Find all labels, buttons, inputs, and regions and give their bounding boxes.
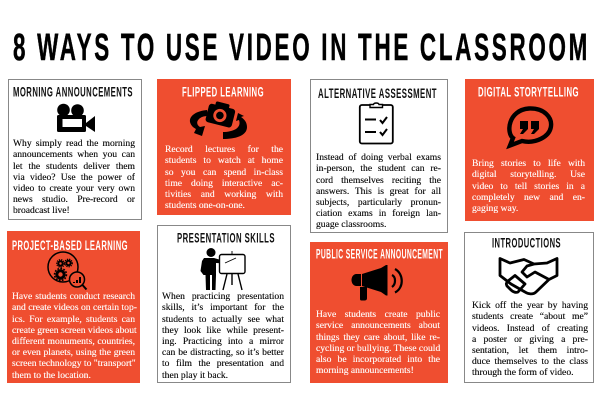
icon: handshake xyxy=(498,257,558,296)
text block xyxy=(12,291,137,380)
text block: When practicing presentation xyxy=(162,291,284,302)
text block: gaging way. xyxy=(472,203,518,214)
panel: presentation skills xyxy=(157,225,291,383)
text block: video to tell stories in a xyxy=(472,181,585,192)
text block: Have students create public xyxy=(316,309,440,320)
text block: via video? Use the power of xyxy=(13,172,135,183)
text block: news studio. Pre-record or xyxy=(13,194,135,205)
text block: skills, it’s important for the xyxy=(162,302,284,313)
text block: tivities and working with xyxy=(165,189,283,200)
text block: let the students deliver them xyxy=(13,161,135,172)
text block: students to watch at home xyxy=(165,155,283,166)
icon: speech bubble xyxy=(506,106,554,150)
text block xyxy=(162,291,284,380)
text block: announcements when you can xyxy=(13,149,135,160)
text block: videos. Instead of creating xyxy=(472,323,588,334)
text block: video to create your very own xyxy=(13,183,135,194)
heading: alternative assessment: ALTERNATIVE ASSESSMENT xyxy=(318,86,437,101)
text block: create green screen videos about xyxy=(12,325,137,336)
text block: screen technology to "transport" xyxy=(12,358,136,369)
text block: digital storytelling. Use xyxy=(472,169,585,180)
text block: ing. Practicing into a mirror xyxy=(162,336,284,347)
text block xyxy=(472,300,588,378)
text block: students to actually see what xyxy=(162,314,284,325)
text block xyxy=(165,144,283,211)
text block: and create videos on certain top- xyxy=(12,302,137,313)
panel: project-based learning xyxy=(7,231,140,383)
text block: things they care about, like re- xyxy=(316,332,440,343)
text block xyxy=(316,309,440,376)
text block: ics. For example, students can xyxy=(12,314,135,325)
panel: digital storytelling xyxy=(465,79,594,221)
panel: public service announcement xyxy=(310,242,448,383)
text block: answers. This is great for all xyxy=(316,186,441,197)
text block: Have students conduct research xyxy=(12,291,135,302)
text block: to film the presentation and xyxy=(162,358,284,369)
text block: so you can spend in-class xyxy=(165,167,283,178)
panel: morning announcements xyxy=(8,79,142,220)
text block: then play it back. xyxy=(162,370,228,380)
text block: cycling or bullying. These could xyxy=(316,343,440,354)
text block: broadcast live! xyxy=(13,205,70,216)
text block: Kick off the year by having xyxy=(472,300,588,311)
text block: through the form of video. xyxy=(472,367,574,378)
text block: duce themselves to the class xyxy=(472,356,588,367)
icon: video camera xyxy=(57,104,95,132)
text block xyxy=(12,138,135,216)
text block: Record lectures for the xyxy=(165,144,283,155)
text block xyxy=(316,152,441,230)
panel: flipped learning xyxy=(157,79,291,215)
text block: sentation, let them intro- xyxy=(472,345,588,356)
heading: morning announcements: MORNING ANNOUNCEMENTS xyxy=(13,84,133,100)
text block: morning announcements! xyxy=(316,365,414,376)
heading: project-based learning: PROJECT-BASED LEARNING xyxy=(12,238,128,253)
text block: students create “about me” xyxy=(472,311,588,322)
panel: alternative assessment xyxy=(310,79,448,233)
text block: students one-on-one. xyxy=(165,200,245,211)
text block xyxy=(472,158,585,214)
text block: in-person, the student can re- xyxy=(316,163,441,174)
text block: ciation exams in foreign lan- xyxy=(316,208,441,219)
text block: also be incorporated into the xyxy=(316,354,440,365)
text block: service announcements about xyxy=(316,320,440,331)
text block: guage classrooms. xyxy=(316,219,386,230)
text block: a poster or giving a pre- xyxy=(472,334,588,345)
text block: can be distracting, so it’s better xyxy=(162,347,284,358)
text block: completely new and en- xyxy=(472,192,585,203)
text block: time doing interactive ac- xyxy=(165,178,283,189)
text block: different monuments, countries, xyxy=(12,336,135,347)
heading: presentation skills: PRESENTATION SKILLS xyxy=(177,231,275,246)
text block: they look like while present- xyxy=(162,325,284,336)
icon: gears and magnifier xyxy=(47,251,88,290)
heading: flipped learning: FLIPPED LEARNING xyxy=(182,84,264,100)
text block: them to the location. xyxy=(12,370,91,380)
icon: clipboard checklist xyxy=(358,102,394,144)
text block: cord themselves reciting the xyxy=(316,175,441,186)
text block: Bring stories to life with xyxy=(472,158,585,169)
heading: public service announcement: PUBLIC SERVICE ANNOUNCEMENT xyxy=(316,247,443,262)
panel: introductions xyxy=(464,232,594,383)
text block: Instead of doing verbal exams xyxy=(316,152,441,163)
text block: or even planets, using the green xyxy=(12,347,135,358)
text block: Why simply read the morning xyxy=(13,138,135,149)
icon: presenter at easel xyxy=(200,248,246,290)
text block: subjects, particularly pronun- xyxy=(316,197,441,208)
icon: rotating camera xyxy=(190,102,247,139)
icon: megaphone xyxy=(352,265,403,300)
